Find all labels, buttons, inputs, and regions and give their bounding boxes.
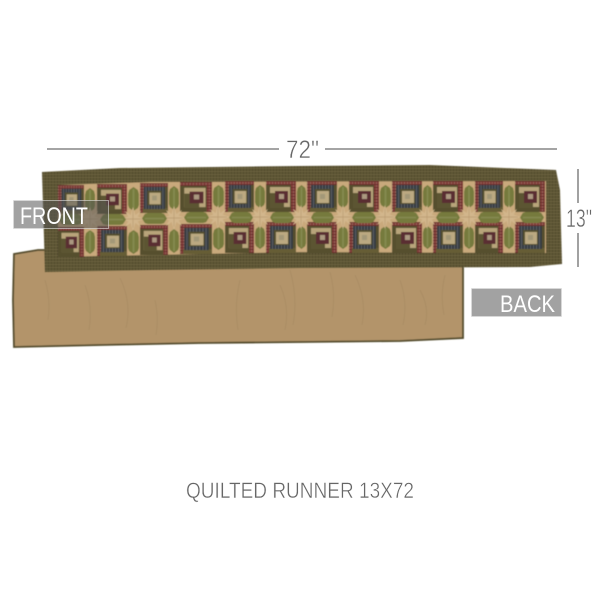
vertical green leaves (85, 185, 514, 254)
dimension: height 13 inches (566, 169, 592, 267)
caption: QUILTED RUNNER 13X72 (186, 478, 414, 503)
panel: runner front patchwork (42, 165, 562, 272)
olive border (42, 165, 562, 272)
cream centre band (58, 181, 546, 257)
panel: runner back (13, 250, 463, 347)
label: FRONT: FRONT (20, 203, 88, 230)
wrinkles (45, 270, 445, 335)
eight-point stars (78, 205, 521, 231)
label: BACK (472, 288, 562, 318)
quilt blocks bottom row (58, 222, 545, 257)
dimension: width 72 inches: 72" (286, 136, 319, 164)
label: BACK: BACK (500, 291, 555, 318)
horizontal green leaves (59, 212, 544, 225)
quilt blocks top row (58, 181, 545, 214)
